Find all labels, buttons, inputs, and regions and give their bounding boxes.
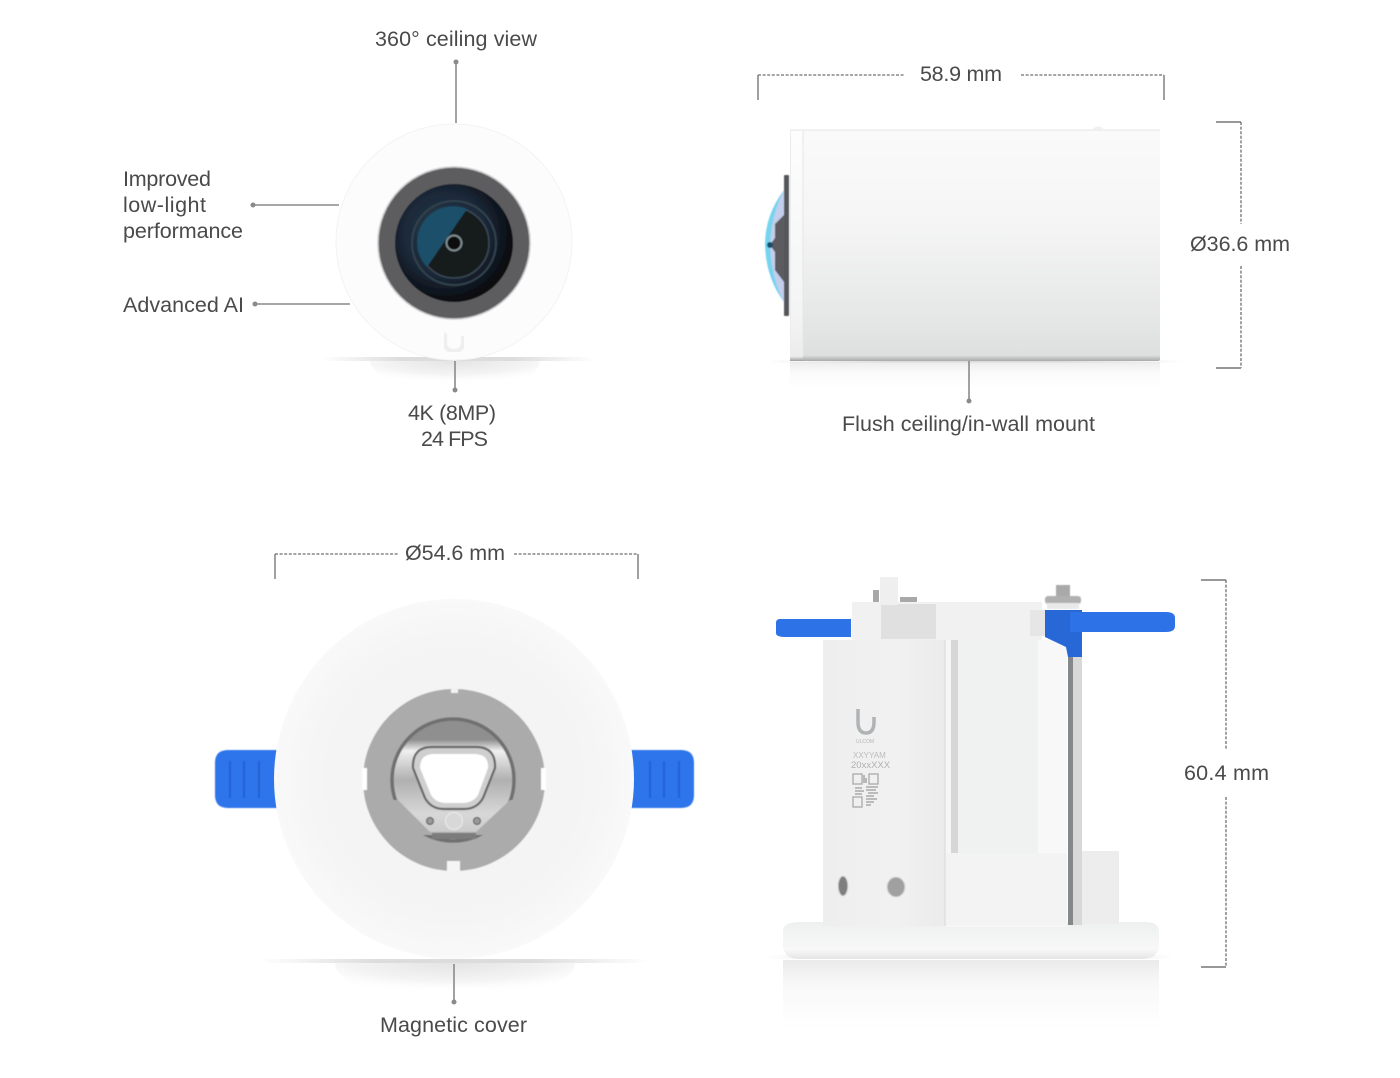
label: 360 ceiling view	[375, 27, 537, 123]
left blue clamp arm	[776, 619, 851, 637]
label: 4K 24 FPS: 4K (8MP)	[408, 401, 496, 425]
QR code	[853, 774, 878, 807]
floor shadow	[320, 357, 595, 391]
dimension: 58.9 mm: 58.9 mm	[920, 62, 1002, 86]
dimension: 60.4 mm: 60.4 mm	[1184, 761, 1269, 785]
label: 360 ceiling view: 360° ceiling view	[375, 27, 537, 51]
screw head	[1045, 585, 1081, 609]
panel: underside view of mount	[215, 599, 694, 1003]
label: 4K 24 FPS: 24 FPS	[421, 427, 488, 451]
engraved label	[851, 709, 891, 771]
label: improved low-light performance: low-light	[123, 193, 206, 217]
mounting holes	[838, 876, 905, 897]
base plate	[783, 922, 1159, 959]
camera face disc	[336, 124, 572, 360]
central opening	[362, 688, 546, 871]
left blue tab	[215, 750, 280, 808]
panel: side view of camera	[765, 126, 1185, 388]
engraved label: XXYYAM	[853, 751, 886, 760]
dimension: diameter 54.6 mm: Ø54.6 mm	[405, 541, 505, 565]
label: advanced AI: Advanced AI	[123, 293, 244, 317]
lens	[378, 167, 530, 319]
cylinder body	[790, 126, 1160, 361]
label: 4K 24 FPS	[408, 361, 496, 451]
label: improved low-light performance	[123, 167, 339, 243]
embossed U logo	[445, 333, 463, 351]
label: flush ceiling/in-wall mount: Flush ceiling/in-wall mount	[842, 412, 1095, 436]
floor shadow	[765, 360, 1185, 388]
rear upper housing	[852, 577, 1060, 642]
label: improved low-light performance: Improved	[123, 167, 211, 191]
round cover disc	[274, 599, 634, 959]
panel: side view of mount	[765, 577, 1175, 1030]
label: flush ceiling/in-wall mount	[842, 361, 1095, 436]
right blue tab	[628, 750, 694, 808]
floor shadow	[765, 955, 1175, 1030]
lens dome side	[765, 175, 789, 316]
label: magnetic cover: Magnetic cover	[380, 1013, 527, 1037]
engraved label: ULCOM	[856, 739, 874, 745]
label: advanced AI	[123, 293, 350, 317]
panel: front view of camera	[320, 124, 595, 391]
main body	[823, 640, 1119, 927]
engraved label: 20xxXXX	[851, 760, 891, 771]
right blue clamp arm	[1045, 610, 1175, 657]
floor shadow	[260, 959, 650, 1003]
dimension: diameter 36.6 mm: Ø36.6 mm	[1190, 232, 1290, 256]
threaded screw	[1068, 640, 1082, 925]
label: magnetic cover	[380, 964, 527, 1037]
label: improved low-light performance: performance	[123, 219, 243, 243]
